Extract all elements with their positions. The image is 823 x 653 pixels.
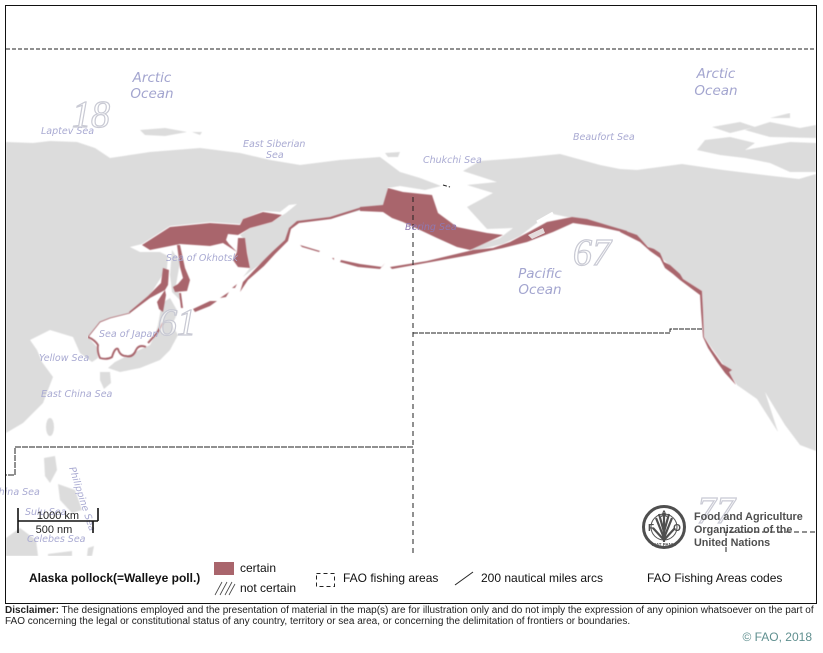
FAO name: Organization of the [694, 524, 792, 536]
ocean labels: Pacific [518, 266, 562, 282]
legend swatch: not certain [215, 582, 235, 595]
sea labels: Sea [266, 150, 284, 161]
sea labels: Beaufort Sea [573, 132, 635, 143]
FAO name: Food and Agriculture [694, 511, 803, 523]
FAO area codes: 67 [573, 232, 613, 274]
sea labels: Philippine Sea [66, 466, 97, 533]
disclaimer: FAO concerning the legal or constitutional status of any country, territory or sea area, or concerning the delimitation of frontiers or boundaries. [5, 616, 630, 627]
range: western Aleutians [300, 245, 385, 269]
FAO area codes: 18 [72, 94, 110, 136]
ocean labels: Arctic [132, 70, 172, 86]
sea labels: East China Sea [41, 389, 113, 400]
legend label: not certain: not certain [240, 581, 296, 595]
range: Kuril Islands [193, 284, 237, 312]
white inlets [460, 213, 553, 222]
legend label: certain: certain [240, 561, 276, 575]
sea labels: Sea of Okhotsk [166, 253, 238, 264]
range: east Sakhalin shelf [173, 245, 190, 292]
range: Tatar Strait [129, 268, 169, 313]
range: Kamchatka and Bering coast [240, 207, 362, 292]
FAO fishing area boundaries [6, 49, 816, 555]
legend label: FAO Fishing Areas codes: FAO Fishing Areas codes [647, 571, 782, 585]
land: Canadian Arctic islands [697, 113, 816, 172]
FAO logo: O [673, 523, 681, 534]
land: Asia [6, 141, 441, 433]
FAO logo: A [661, 509, 668, 519]
land: Sakhalin, Hokkaido and Japan [100, 250, 182, 389]
FAO area codes: 61 [158, 302, 196, 344]
sea labels: Bering Sea [405, 222, 457, 233]
sea labels: Chukchi Sea [423, 155, 482, 166]
sea labels [0, 126, 635, 545]
legend label: 200 nautical miles arcs: 200 nautical miles arcs [481, 571, 603, 585]
range: Hokkaido west shelf [157, 290, 166, 312]
FAO area codes [72, 94, 737, 532]
ocean labels [130, 66, 738, 298]
FAO area codes: 77 [697, 490, 737, 532]
range: Aleutian and Alaska Peninsula [390, 217, 627, 269]
range: Sea of Okhotsk [142, 212, 282, 252]
ocean labels: Ocean [130, 86, 174, 102]
legend [29, 561, 782, 595]
range: Primorye coast thread [88, 313, 130, 337]
range: North American west coast [620, 229, 736, 385]
FAO logo [644, 506, 684, 548]
scale bar: 500 nm [36, 524, 72, 536]
scale bar [18, 508, 98, 536]
land: Philippines and Borneo [6, 456, 94, 556]
map: pollock distribution (certain) [88, 188, 736, 385]
legend swatch: certain [214, 562, 234, 575]
ocean labels: Ocean [518, 282, 562, 298]
legend swatch: FAO fishing areas [316, 574, 334, 586]
land: North America [463, 154, 816, 451]
FAO logo: F [648, 523, 654, 534]
sea labels: East Siberian [243, 139, 305, 150]
range: west Kamchatka shelf [233, 238, 250, 268]
copyright: © FAO, 2018 [742, 630, 812, 644]
range: Bering Sea [360, 188, 503, 250]
range: Sea of Japan coast [88, 323, 163, 359]
disclaimer: Disclaimer: The designations employed and the presentation of material in the map(s) are for illustration only and do not imply the expression of any opinion whatsoever on the part of [5, 605, 814, 616]
scale bar: 1000 km [37, 510, 79, 522]
legend swatch: 200 nautical miles arcs [455, 572, 473, 585]
kodiak island [528, 228, 545, 239]
sea labels: Laptev Sea [41, 126, 94, 137]
FAO logo: FIAT PANIS [652, 542, 676, 547]
sea labels: Sulu Sea [25, 507, 67, 518]
FAO name: United Nations [694, 537, 770, 549]
ocean labels: Arctic [696, 66, 736, 82]
ocean labels: Ocean [694, 83, 738, 99]
sea labels: Celebes Sea [27, 534, 86, 545]
sea labels: Yellow Sea [39, 353, 89, 364]
land: Siberian islands [140, 128, 400, 157]
map: land masses [6, 113, 816, 556]
range: south Sakhalin thread [179, 293, 183, 308]
sea labels: Sea of Japan [99, 329, 158, 340]
legend label: FAO fishing areas: FAO fishing areas [343, 571, 438, 585]
land: Taiwan [46, 418, 54, 436]
legend title: Alaska pollock(=Walleye poll.) [29, 571, 200, 585]
